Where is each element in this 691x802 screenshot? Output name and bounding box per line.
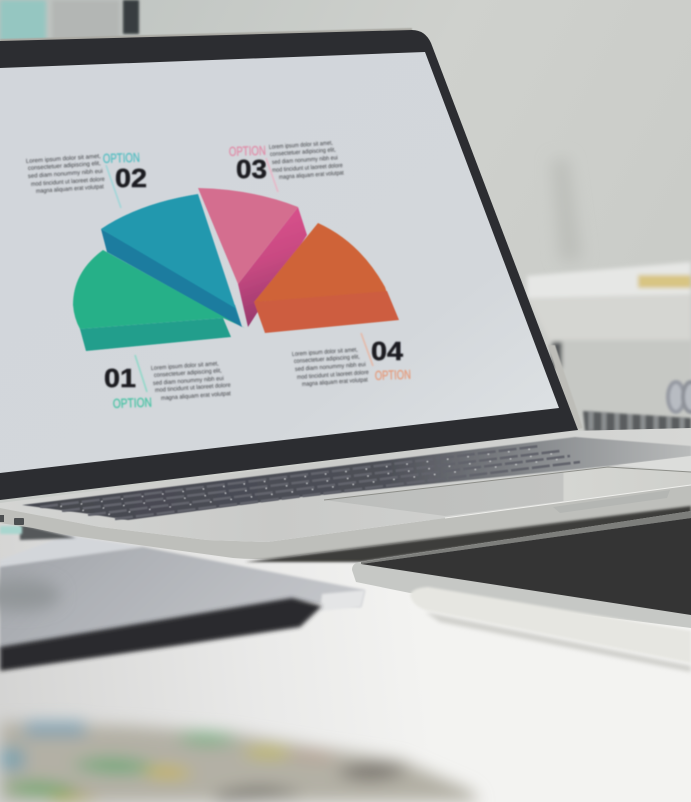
tablet top rim — [361, 511, 691, 564]
tablet body — [352, 511, 691, 628]
label: option 03: 03 — [236, 154, 267, 184]
notebook surface — [0, 547, 365, 650]
label: option 02 — [26, 150, 147, 208]
label: option 01: magna aliquam erat volutpat — [161, 391, 231, 402]
label: option 01: mod tincidunt ut laoreet dolore — [155, 383, 232, 394]
top lip — [0, 28, 412, 42]
slice 03 pink — [198, 188, 307, 327]
label: option 04: OPTION — [375, 367, 411, 383]
label: option 04: 04 — [371, 336, 404, 366]
laptop base — [0, 428, 691, 559]
lorem text block: Lorem ipsum dolor sit amet, — [292, 347, 358, 358]
table surface — [0, 520, 691, 802]
front notch — [553, 490, 670, 513]
laptop lid — [0, 28, 583, 500]
label: option 03: consectetuer adipiscing elit, — [270, 147, 336, 158]
label: option 01 — [104, 355, 232, 411]
tablet shadow — [245, 506, 691, 562]
label: option 04 — [292, 333, 411, 388]
dark shading — [0, 579, 60, 611]
background: spiral notebook — [583, 382, 691, 437]
lorem text block: Lorem ipsum dolor sit amet, — [151, 361, 219, 372]
slice 01 green — [73, 250, 245, 351]
label: option 02: OPTION — [103, 150, 140, 166]
slice 04 orange — [254, 223, 399, 333]
stylus pen — [410, 587, 691, 672]
lorem text block: Lorem ipsum dolor sit amet, — [269, 141, 333, 151]
label: option 02: consectetuer adipiscing elit, — [28, 161, 101, 172]
label: option 04: magna aliquam erat volutpat — [302, 377, 368, 388]
label: option 04: mod tincidunt ut laoreet dolore — [297, 370, 370, 381]
trackpad edge — [324, 467, 691, 500]
key rows — [40, 446, 580, 519]
keyboard — [22, 437, 691, 520]
label: option 02: 02 — [115, 163, 147, 193]
background: white shelf — [527, 262, 691, 420]
label: option 03 — [229, 141, 344, 192]
label: option 02: magna aliquam erat volutpat — [36, 184, 104, 195]
blurred colour swatches foreground — [0, 722, 480, 802]
label: option 04: consectetuer adipiscing elit, — [294, 354, 360, 365]
hinge highlight — [548, 345, 583, 430]
label: option 01: 01 — [104, 363, 136, 393]
bezel — [0, 30, 578, 500]
lorem text block: Lorem ipsum dolor sit amet, — [26, 154, 101, 165]
label: option 02: mod tincidunt ut laoreet dolore — [31, 177, 106, 188]
pie chart on screen — [73, 188, 399, 351]
label: option 03: sed diam nonummy nibh eui — [272, 155, 338, 166]
trackpad — [324, 467, 691, 516]
label: option 01: consectetuer adipiscing elit, — [154, 368, 222, 379]
label: option 01: sed diam nonummy nibh eui — [153, 376, 224, 387]
notebook white corner — [320, 590, 365, 611]
base edge — [0, 485, 691, 559]
white palm patch — [618, 456, 691, 472]
label: option 04: sed diam nonummy nibh eui — [295, 362, 366, 373]
slice 02 blue — [101, 194, 242, 327]
pen shadow — [425, 612, 691, 672]
pen body — [410, 587, 691, 663]
label: option 03: OPTION — [229, 143, 266, 159]
tablet screen — [361, 518, 691, 615]
label: option 03: mod tincidunt ut laoreet dolore — [272, 163, 344, 174]
under shadow — [20, 524, 76, 540]
front bright edge — [445, 485, 691, 518]
tablet — [245, 506, 691, 628]
back sheet — [0, 535, 143, 571]
label: option 03: magna aliquam erat volutpat — [279, 170, 344, 181]
label: option 01: OPTION — [113, 395, 152, 411]
base top — [0, 428, 691, 542]
label: option 02: sed diam nonummy nibh eui — [28, 169, 103, 180]
black strip — [0, 598, 322, 671]
notebook with pen — [0, 535, 365, 671]
screen — [0, 52, 559, 473]
ports — [0, 515, 4, 522]
teal reflection — [0, 526, 22, 534]
